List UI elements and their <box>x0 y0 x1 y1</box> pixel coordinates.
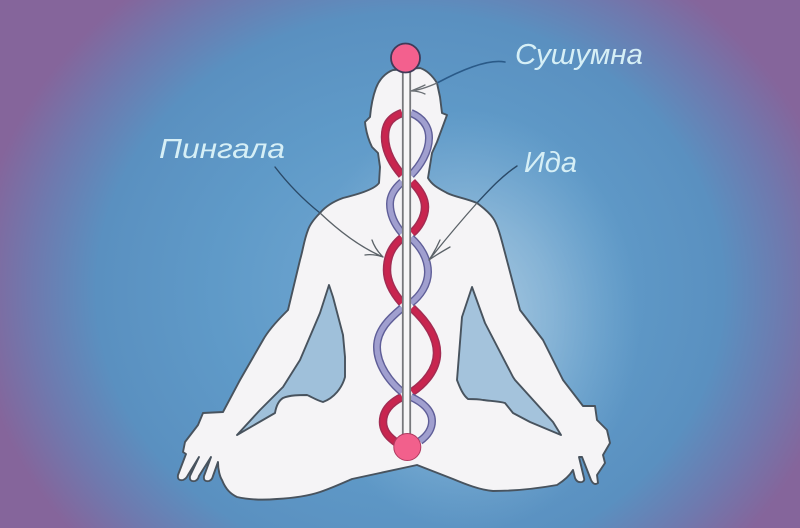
ida channel: purple strand <box>377 113 432 441</box>
right arm gap <box>457 287 561 435</box>
top chakra circle <box>391 44 420 72</box>
arrow: ida <box>429 166 517 260</box>
bottom chakra circle <box>394 434 421 460</box>
arrow: sushumna <box>411 61 505 94</box>
left arm gap <box>237 285 345 435</box>
seated body silhouette <box>178 68 610 500</box>
arrow: pingala <box>275 167 383 257</box>
label: Сушумна: Сушумна <box>515 39 643 71</box>
pingala channel: red strand <box>383 113 437 443</box>
label: Ида: Ида <box>524 147 577 179</box>
label: Пингала: Пингала <box>159 133 285 164</box>
sushumna channel: central column <box>403 70 410 438</box>
